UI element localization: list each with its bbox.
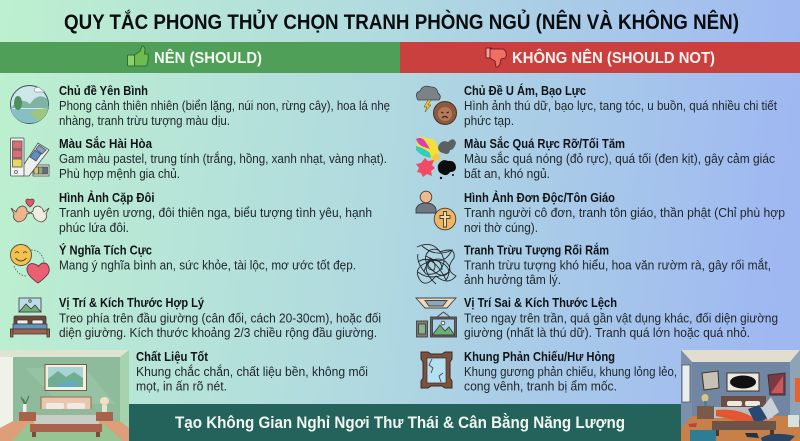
item: positive meaning [10, 242, 356, 283]
text: description [136, 364, 368, 394]
title: QUY TẮC PHONG THỦY CHỌN TRANH PHÒNG NGỦ (NÊN VÀ KHÔNG NÊN) [64, 10, 739, 34]
icon: smile and heart [10, 244, 49, 283]
item: harmonious colours [10, 136, 387, 181]
icon: landscape [10, 86, 48, 124]
text: description: diện giường. Kích thước khoảng 2/3 chiều rộng đầu giường. [59, 325, 377, 340]
text: description: phúc lứa đôi. [59, 220, 129, 235]
should not label: KHÔNG NÊN (SHOULD NOT) [512, 48, 715, 67]
text: title: Chủ đề Yên Bình [59, 83, 148, 98]
text: description: ảnh hưởng tâm lý. [464, 272, 561, 287]
panel: should header [0, 42, 400, 73]
text: description: Phù hợp mệnh gia chủ. [59, 166, 180, 181]
icon: cracked mirror frame [421, 352, 452, 388]
item: peaceful theme [10, 83, 390, 128]
text: description [464, 310, 778, 340]
text: description: bất an, khó ngủ. [464, 166, 550, 181]
text: title: Tranh Trừu Tượng Rối Rắm [464, 242, 609, 258]
text: description [464, 151, 775, 181]
item: good placement and size [10, 295, 381, 340]
item: messy abstract art [417, 242, 771, 287]
text: title: Chất Liệu Tốt [136, 349, 209, 364]
text: description: Gam màu pastel, trung tính (trắng, hồng, xanh nhạt, vàng nhạt). [59, 151, 387, 166]
text: description [464, 205, 785, 235]
icon: scribble [417, 244, 456, 284]
text: description: mọt, in ấn rõ nét. [136, 378, 227, 394]
text: description: Khung chắc chắn, chất liệu bền, không mối [136, 364, 368, 379]
text: description [464, 258, 771, 287]
text: title: Chủ Đề U Ám, Bạo Lực [464, 83, 586, 98]
should label: NÊN (SHOULD) [154, 48, 262, 67]
footer text: Tạo Không Gian Nghỉ Ngơi Thư Thái & Cân Bằng Năng Lượng [175, 413, 625, 432]
text: description: nơi thờ cúng). [464, 220, 538, 235]
crooked paintings [702, 371, 785, 395]
icon: person and cross [416, 191, 456, 230]
text: title: Hình Ảnh Cặp Đôi [59, 190, 154, 205]
icon: thumbs up [128, 46, 148, 66]
text: description: nhàng, tranh trừu tượng màu dịu. [59, 113, 230, 128]
icon: paint splashes [416, 137, 456, 179]
text: title: Vị Trí Sai & Kích Thước Lệch [464, 295, 617, 310]
icon: colour palette [10, 138, 49, 176]
text: title: Màu Sắc Quá Rực Rỡ/Tối Tăm [464, 136, 625, 151]
text: description: giường (nhất là thú dữ). Tranh quá lớn hoặc quá nhỏ. [464, 325, 750, 340]
item: overly bright or dark colours [416, 136, 775, 181]
panel: should not list [416, 83, 785, 394]
icon: painting over bed [10, 298, 50, 337]
text: description [59, 98, 390, 128]
text: description [59, 151, 387, 181]
item: gloomy and violent theme [416, 83, 777, 128]
item: wrong placement and size [416, 295, 778, 340]
icon: storm cloud and lion [416, 86, 456, 124]
text: title: Khung Phản Chiếu/Hư Hỏng [464, 349, 615, 364]
text: description: Màu sắc quá nóng (đỏ rực), quá tối (đen kịt), gây cảm giác [464, 151, 775, 166]
item: reflective or damaged frame [421, 349, 677, 394]
text: description [464, 98, 777, 128]
text: description: Tranh trừu tượng khó hiểu, hoa văn rườm rà, gây rối mắt, [464, 258, 771, 272]
text: title: Ý Nghĩa Tích Cực [59, 242, 152, 258]
panel: should not header [400, 42, 800, 73]
text: title: Màu Sắc Hài Hòa [59, 136, 153, 151]
item: lonely or religious images [416, 190, 785, 235]
illustration: tidy bedroom [0, 350, 129, 441]
bed [30, 397, 102, 437]
text: description: Khung gương phản chiếu, khung lỏng lẻo, [464, 364, 677, 379]
text: description [59, 205, 372, 235]
text: description [59, 310, 381, 340]
item: couple images [11, 190, 372, 235]
text: description: Treo phía trên đầu giường (cân đối, cách 20-30cm), hoặc đối [59, 310, 381, 326]
text: description: cong vênh, tranh bị ẩm mốc. [464, 378, 617, 394]
text: description: phức tạp. [464, 113, 514, 128]
text: description: Mang ý nghĩa bình an, sức khỏe, tài lộc, mơ ước tốt đẹp. [59, 258, 356, 272]
icon: thumbs down [486, 48, 506, 67]
text: title: Hình Ảnh Đơn Độc/Tôn Giáo [464, 190, 615, 205]
panel: should list [10, 83, 390, 394]
unmade bed [712, 396, 779, 436]
nightstands and decor [19, 396, 113, 421]
item: good material [136, 349, 368, 394]
painting [45, 364, 86, 390]
text: description: Tranh uyên ương, đôi thiên nga, biểu tượng tình yêu, hạnh [59, 205, 372, 220]
text: description [464, 364, 677, 394]
clutter [688, 378, 800, 441]
footer banner [129, 404, 681, 441]
text: description: Phong cảnh thiên nhiên (biển lặng, núi non, rừng cây), hoa lá nhẹ [59, 98, 390, 113]
icon: misplaced frames [416, 298, 456, 337]
icon: love birds [11, 199, 49, 222]
illustration: messy bedroom [681, 350, 800, 441]
text: title: Vị Trí & Kích Thước Hợp Lý [59, 295, 205, 310]
